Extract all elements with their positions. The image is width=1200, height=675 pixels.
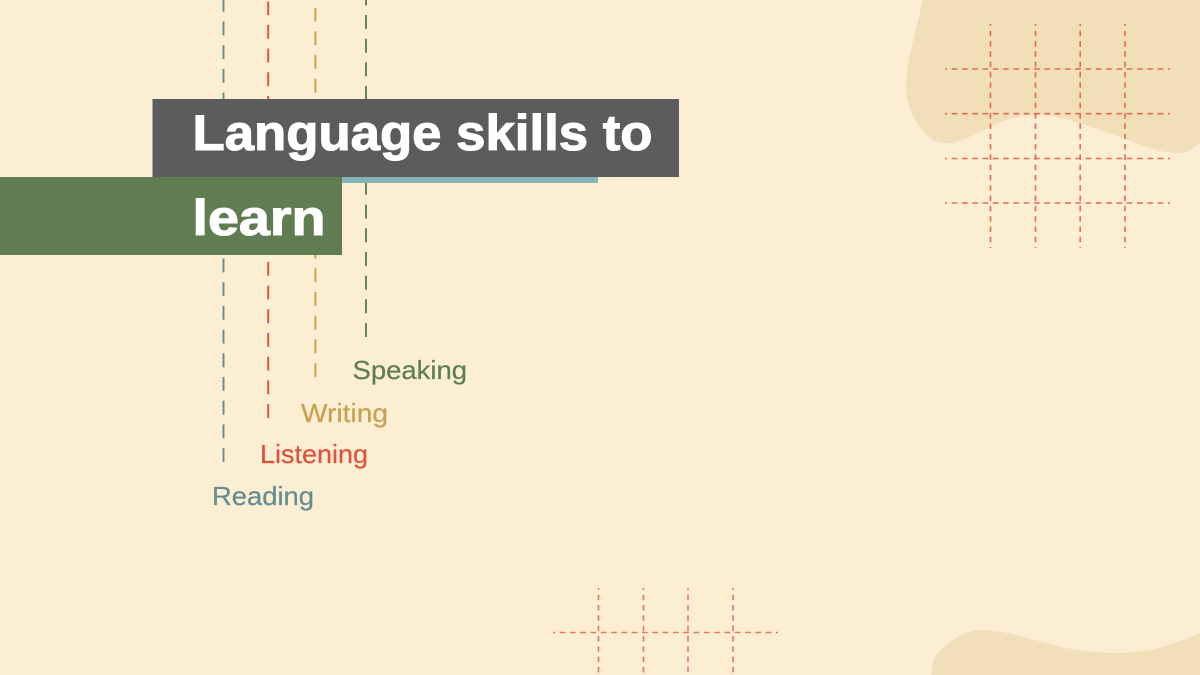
dashed line: reading [222,0,224,462]
title [192,105,652,246]
label: reading: Reading [212,481,314,511]
dashed grid: bottom centre [553,588,778,675]
blob: bottom right [931,630,1200,675]
blob: top right [906,0,1200,153]
title: learn [192,190,326,246]
label: speaking: Speaking [352,355,467,385]
label: listening: Listening [260,439,368,469]
title bar: green [0,177,342,255]
dashed line: listening [267,2,269,418]
title bar: grey [152,99,679,177]
dashed line: speaking [365,0,367,337]
dashed line: writing [314,8,316,377]
title: Language skills to [192,105,652,161]
accent bar: teal [342,177,598,183]
dashed grid: top right [945,24,1170,248]
label: writing: Writing [301,398,388,428]
